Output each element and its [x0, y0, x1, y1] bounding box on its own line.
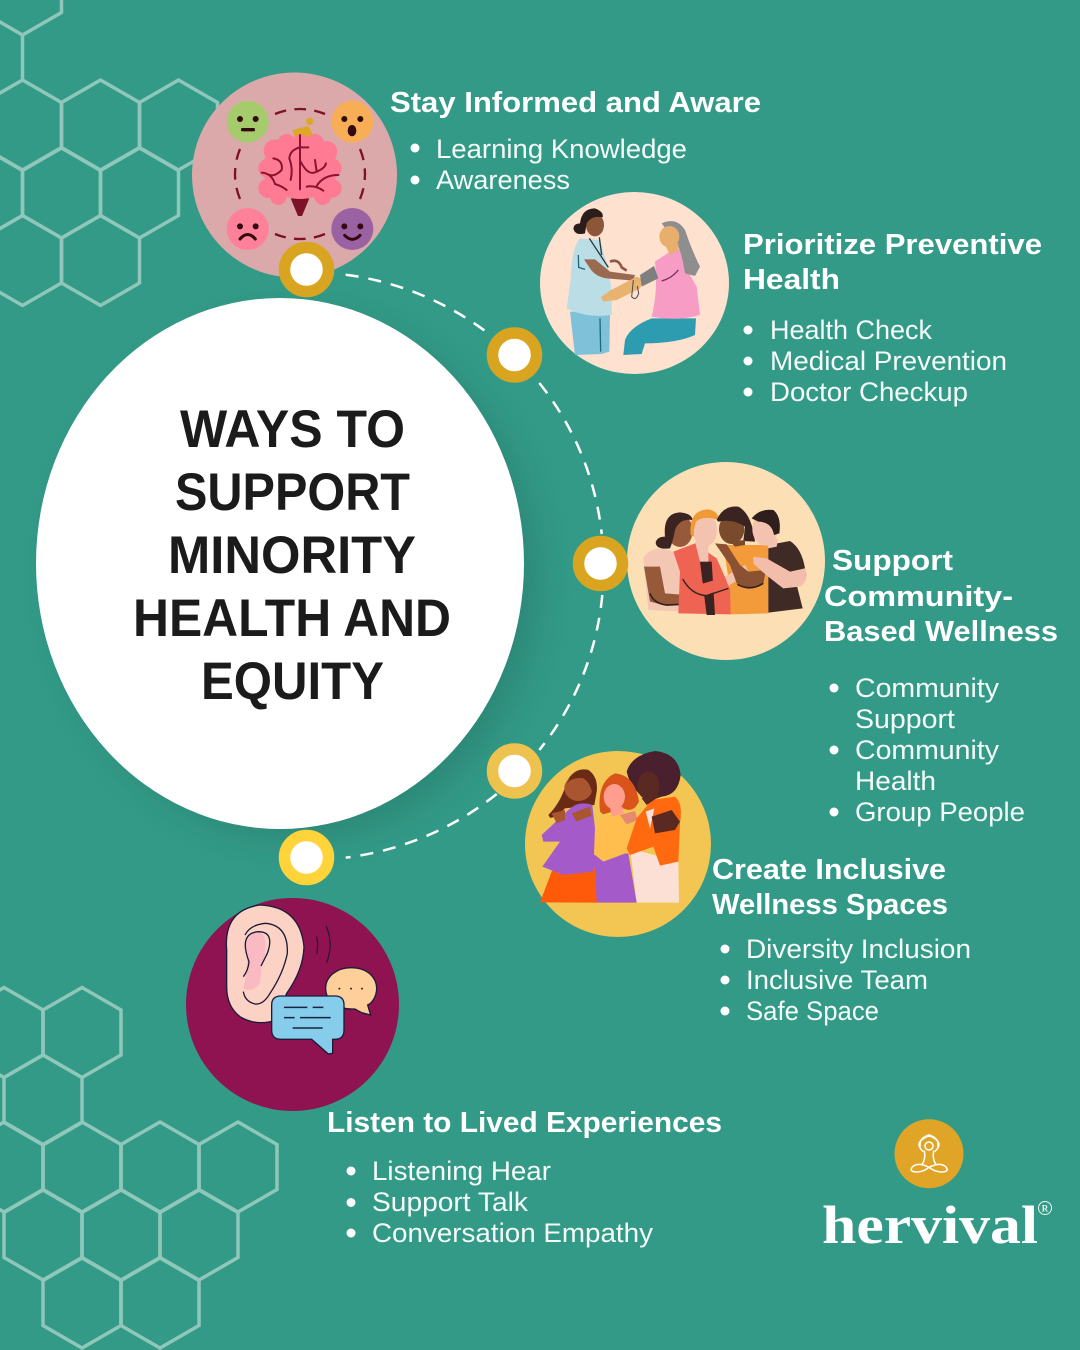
text block: Support Community-Based Wellness: Support	[855, 704, 956, 734]
text block: Support Community-Based Wellness: Health	[855, 766, 936, 796]
logo: hervival	[822, 1119, 1052, 1255]
text block: Support Community-Based Wellness: Based Wellness	[824, 616, 1058, 648]
text block: Support Community-Based Wellness: Group People	[855, 797, 1025, 827]
text block: Support Community-Based Wellness: Community	[855, 735, 1000, 765]
text block: Create Inclusive Wellness Spaces: Diversity Inclusion	[746, 934, 971, 964]
connector node 4	[492, 749, 536, 793]
connector node 3	[578, 542, 622, 586]
text block: Listen to Lived Experiences	[327, 1107, 722, 1248]
text block: Prioritize Preventive Health: Health Check	[770, 315, 933, 345]
logo: hervival: hervival	[822, 1195, 1038, 1255]
connector node 5	[284, 836, 328, 880]
title: MINORITY	[168, 526, 416, 585]
text block: Prioritize Preventive Health	[743, 229, 1042, 407]
icon: ear with speech bubbles	[186, 898, 399, 1111]
title	[133, 400, 451, 711]
text block: Support Community-Based Wellness: Community-	[824, 581, 1013, 613]
text block: Stay Informed and Aware: Learning Knowledge	[436, 134, 687, 164]
title: WAYS TO	[180, 400, 405, 459]
text block: Stay Informed and Aware: Awareness	[436, 165, 570, 195]
text block: Prioritize Preventive Health: Medical Prevention	[770, 346, 1007, 376]
text block: Prioritize Preventive Health: Health	[743, 264, 840, 296]
text block: Create Inclusive Wellness Spaces	[712, 854, 971, 1026]
text block: Listen to Lived Experiences: Listening Hear	[372, 1156, 551, 1186]
text block: Create Inclusive Wellness Spaces: Inclusive Team	[746, 965, 928, 995]
connector node 2	[492, 333, 536, 377]
icon: nurse checking patient's blood pressure	[540, 192, 729, 374]
central title circle	[36, 298, 538, 838]
text block: Prioritize Preventive Health: Doctor Checkup	[770, 377, 968, 407]
logo: hervival: R	[1042, 1204, 1049, 1214]
icon: brain with emotion faces	[192, 72, 397, 278]
text block: Listen to Lived Experiences: Support Talk	[372, 1187, 529, 1217]
text block: Stay Informed and Aware	[390, 87, 761, 195]
text block: Support Community-Based Wellness: Community	[855, 673, 1000, 703]
hexagon pattern top left	[0, 0, 218, 306]
title: EQUITY	[201, 652, 384, 711]
hexagon pattern bottom left	[0, 988, 277, 1348]
text block: Create Inclusive Wellness Spaces: Create Inclusive	[712, 854, 946, 886]
connector node 1	[284, 248, 328, 292]
text block: Create Inclusive Wellness Spaces: Wellness Spaces	[712, 889, 948, 921]
title: SUPPORT	[175, 463, 410, 522]
text block: Prioritize Preventive Health: Prioritize Preventive	[743, 229, 1042, 261]
title: HEALTH AND	[133, 589, 451, 648]
dashed connector arc	[346, 275, 602, 858]
icon: four people embracing	[627, 462, 825, 660]
text block: Support Community-Based Wellness: Support	[832, 545, 954, 577]
text block: Support Community-Based Wellness	[824, 545, 1058, 827]
text block: Stay Informed and Aware: Stay Informed and Aware	[390, 87, 761, 119]
icon: three women hugging themselves	[525, 751, 711, 937]
text block: Listen to Lived Experiences: Conversation Empathy	[372, 1218, 654, 1248]
text block: Listen to Lived Experiences: Listen to Lived Experiences	[327, 1107, 722, 1139]
text block: Create Inclusive Wellness Spaces: Safe Space	[746, 996, 879, 1026]
